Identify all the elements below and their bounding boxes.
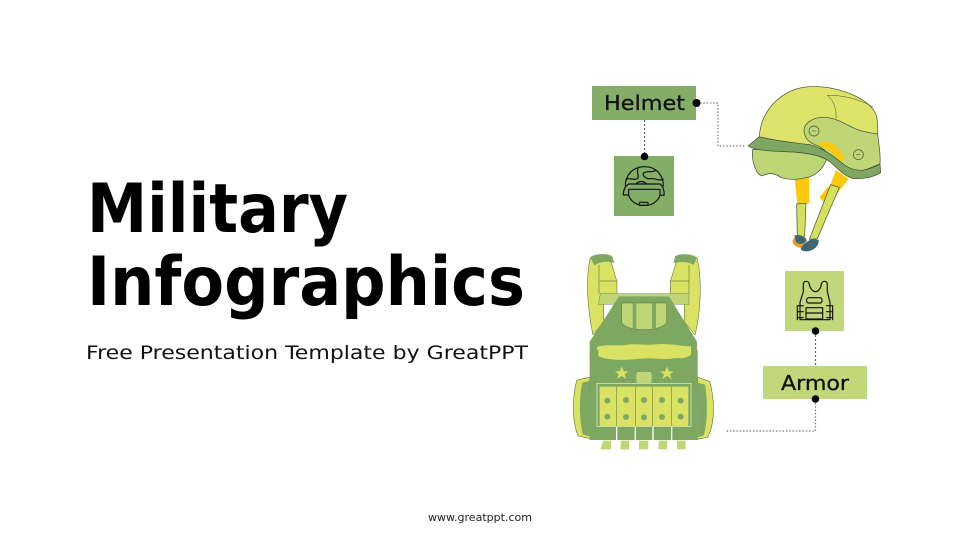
stars [615, 367, 674, 379]
chin cup [793, 235, 819, 251]
upper armor [588, 254, 700, 355]
side panel [804, 117, 880, 173]
admin pocket [622, 303, 667, 330]
armor illustration [573, 254, 713, 449]
shoulder tips [590, 254, 614, 266]
left strap [795, 176, 809, 237]
connector: armor label to vest [726, 403, 816, 431]
yellow clip [819, 141, 845, 162]
connector: helmet label to icon [644, 120, 646, 156]
magazine pouches [597, 383, 691, 427]
helmet illustration [748, 87, 881, 251]
lower armor [573, 350, 713, 449]
helmet icon tile [614, 153, 674, 216]
subtitle: Free Presentation Template by GreatPPT [86, 342, 528, 364]
armor icon tile [785, 271, 844, 335]
title: Infographics [87, 243, 525, 322]
helmet label: Helmet [604, 91, 685, 115]
side wings [573, 377, 713, 439]
shoulder straps [588, 258, 700, 335]
rim [748, 137, 881, 179]
center tab [636, 372, 652, 383]
rivets [809, 126, 819, 136]
connector: armor icon to label [814, 331, 816, 366]
dome [759, 87, 878, 160]
pouch gaps [616, 427, 672, 441]
plate [590, 296, 697, 355]
title: Military [87, 170, 348, 249]
scalloped pouch bottom [598, 350, 691, 360]
armor label: Armor [781, 371, 850, 395]
connector: helmet label to helmet [700, 103, 745, 146]
ear guard [752, 149, 827, 179]
footer url: www.greatppt.com [428, 512, 532, 524]
dome seam [827, 95, 873, 118]
right strap [809, 170, 849, 239]
vest body [590, 350, 698, 440]
armor label [763, 366, 867, 403]
collar bar [598, 294, 689, 304]
helmet label [592, 86, 700, 120]
title [87, 170, 525, 322]
bottom tabs [600, 441, 686, 449]
scalloped pouch top [597, 344, 691, 355]
pouch dots [604, 397, 684, 420]
